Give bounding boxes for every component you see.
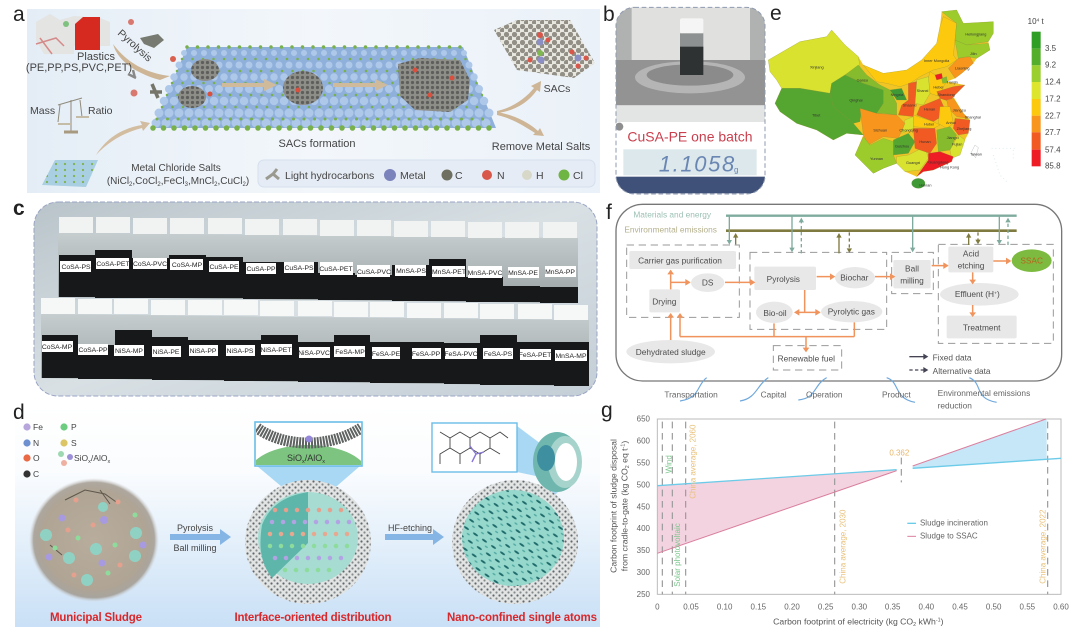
element legend [23, 422, 110, 479]
y tick labels: 350 [637, 546, 651, 555]
node labels: Dehydrated sludge [636, 347, 706, 357]
emissions label: Environmental emissions [624, 224, 717, 234]
color scale: 3.5 [1045, 44, 1057, 53]
bottom vial row: NiSA-MP [115, 348, 143, 355]
map provinces: Yunnan [870, 157, 883, 161]
arrow: salts to lattice [96, 121, 150, 155]
map provinces: Xinjiang [810, 66, 824, 70]
dashed system boundaries [627, 244, 1053, 370]
map provinces: Guizhou [895, 144, 909, 148]
inset: interface: x [302, 459, 305, 465]
x tick labels: 0.05 [683, 602, 699, 611]
scenario labels: Wind [665, 455, 674, 473]
icon: plastics [36, 14, 110, 54]
mass label: Mass [30, 105, 55, 117]
axis titles: 2 [913, 622, 916, 628]
top vial row: CuSA-PVC [357, 269, 391, 276]
node labels [636, 248, 1043, 363]
map provinces: Taiwan [970, 153, 982, 157]
axis titles: Carbon footprint of electricity (kg CO [773, 616, 913, 626]
bottom vial row: FeSA-PET [519, 352, 551, 359]
boundary labels [664, 388, 1030, 410]
y tick labels: 400 [637, 524, 651, 533]
panel c: vial photo [13, 197, 597, 396]
x tick labels [655, 602, 1069, 611]
zoom beam to sphere [528, 480, 570, 505]
axis titles: from cradle-to-gate (kg CO [619, 468, 629, 571]
label f: f [606, 201, 612, 224]
x tick labels: 0.60 [1053, 602, 1069, 611]
top vial row: MnSA-PP [545, 269, 575, 276]
ratio label: Ratio [88, 105, 113, 117]
boundary labels: Capital [761, 390, 787, 400]
bottom vial row: NiSA-PET [261, 347, 291, 354]
color scale: 27.7 [1045, 128, 1061, 137]
element legend: N [33, 438, 39, 448]
legend [258, 160, 595, 187]
data legend [909, 353, 991, 376]
balance reading: 1.1058 [659, 152, 736, 177]
sphere: interface-oriented [245, 480, 371, 604]
legend: H [536, 170, 544, 182]
chart legend [907, 519, 988, 541]
map provinces: Hainan [919, 184, 931, 188]
x tick labels: 0.20 [784, 602, 800, 611]
legend: N [497, 170, 505, 182]
top vial row: CuSA-PP [246, 266, 276, 273]
scenario labels [665, 424, 1047, 587]
batch caption: CuSA-PE one batch [627, 128, 753, 144]
HF etching label: HF-etching [388, 523, 432, 533]
inset: interface: /AlO [305, 453, 322, 463]
node labels: Effluent (H [955, 289, 994, 299]
map provinces: Gansu [857, 78, 868, 82]
label d: d [13, 401, 25, 424]
y tick labels: 550 [637, 458, 651, 467]
data lines [657, 419, 1061, 553]
top vial row: MnSA-PE [508, 270, 538, 277]
map provinces: Hebei [933, 86, 943, 90]
bottom vial row: MnSA-MP [556, 353, 587, 360]
label g: g [601, 399, 613, 422]
color scale: 57.4 [1045, 145, 1061, 154]
top vial row: CuSA-PET [319, 266, 353, 273]
data legend: Fixed data [933, 353, 972, 363]
remove salts label: Remove Metal Salts [492, 141, 591, 153]
bottom vial row: FeSA-PS [484, 351, 513, 358]
map provinces: Guangxi [906, 161, 920, 165]
plot frame [657, 419, 1061, 594]
node labels: Renewable fuel [778, 353, 835, 363]
x tick labels: 0.40 [919, 602, 935, 611]
bottom vial row: CoSA-PP [78, 347, 108, 354]
inset: interface: SiO [287, 453, 302, 463]
carbon clusters [178, 58, 470, 112]
bottom vial row [41, 298, 589, 386]
color scale: 85.8 [1045, 162, 1061, 171]
map provinces: Fujian [952, 142, 962, 146]
element legend: x [107, 459, 110, 465]
axis titles: kWh [916, 616, 936, 626]
axis titles: -1 [936, 618, 941, 624]
label c: c [13, 197, 25, 220]
legend: Metal [400, 170, 426, 182]
bottom vial row: NiSA-PP [190, 348, 217, 355]
y tick labels [637, 415, 651, 599]
map provinces: Zhejiang [957, 127, 971, 131]
map provinces: Jilin [970, 52, 977, 56]
top vial row [58, 217, 578, 303]
salts formula: ,CoCl [132, 176, 157, 187]
node labels: Drying [652, 296, 677, 306]
element legend: O [33, 453, 40, 463]
node labels: Carrier gas purification [638, 256, 722, 266]
pyrolysis label: Pyrolysis [115, 27, 154, 64]
node labels: milling [900, 275, 924, 285]
top vial row: CoSA-PS [61, 264, 91, 271]
boundary labels: Operation [806, 390, 843, 400]
x tick labels: 0.45 [952, 602, 968, 611]
axis titles: Carbon footprint of sludge disposal [609, 439, 619, 573]
bottom vial row: NiSA-PS [227, 348, 254, 355]
map provinces: Henan [924, 107, 935, 111]
bus labels: Materials and energy [633, 210, 712, 220]
boundary labels: Transportation [664, 390, 718, 400]
color scale: 12.4 [1045, 77, 1061, 86]
panel e: China map [768, 2, 1061, 188]
plastics list: (PE,PP,PS,PVC,PET) [26, 62, 132, 74]
chart legend: Sludge to SSAC [920, 532, 978, 541]
map provinces: Anhui [946, 121, 956, 125]
color scale: t [1039, 17, 1045, 26]
element legend: /AlO [91, 453, 108, 463]
map provinces: Hunan [919, 140, 931, 144]
node labels: DS [702, 278, 714, 288]
salts formula: 2 [242, 182, 246, 188]
scenario labels: 0.362 [889, 449, 910, 458]
scenario labels: China average, 2022 [1038, 509, 1047, 584]
salts formula: 2 [129, 182, 133, 188]
panel b: photo of weighed batch [615, 7, 765, 194]
scenario labels: China average, 2030 [839, 509, 848, 584]
map provinces: Shaanxi [903, 103, 917, 107]
y tick labels: 250 [637, 590, 651, 599]
zoom beam [257, 466, 360, 492]
map provinces: Sichuan [873, 128, 887, 132]
zoom beam to tube [517, 426, 545, 478]
map provinces: Tibet [812, 114, 821, 118]
scenario labels: China average, 2060 [688, 424, 697, 499]
node labels: Pyrolytic gas [828, 307, 875, 317]
axis titles: -1 [621, 444, 627, 448]
salts formula: 3 [185, 182, 189, 188]
bottom vial row: CoSA-MP [42, 344, 73, 351]
panel d: sludge to single atoms [13, 401, 600, 627]
inset: carbon lattice [432, 423, 517, 472]
y tick labels: 300 [637, 568, 651, 577]
formation label: SACs formation [278, 138, 356, 150]
top vial row: CoSA-PVC [133, 261, 167, 268]
legend: Cl [573, 170, 583, 182]
y tick labels: 650 [637, 415, 651, 424]
boundary labels: Product [882, 390, 911, 400]
salts label: Metal Chloride Salts [131, 163, 221, 174]
inset: interface [254, 421, 363, 467]
node labels: Pyrolysis [767, 274, 800, 284]
inputs and emissions bus [726, 216, 1017, 253]
element legend: P [71, 422, 77, 432]
axis titles: 2 [625, 465, 631, 468]
map provinces: Tianjin [947, 80, 958, 84]
axis titles [609, 439, 944, 628]
top vial row: CuSA-PS [284, 265, 314, 272]
boundary flow arrows [680, 378, 997, 402]
orange flows [671, 261, 1007, 348]
y tick labels: 500 [637, 480, 651, 489]
node labels: Treatment [963, 322, 1001, 332]
bottom vial row: FeSA-PE [372, 351, 401, 358]
plastics label: Plastics [77, 51, 115, 63]
bottom vial row: FeSA-PP [412, 351, 441, 358]
metal chloride tile [42, 160, 98, 187]
light hydrocarbon molecules [128, 19, 176, 98]
legend: Light hydrocarbons [285, 170, 374, 182]
y tick labels: 600 [637, 436, 651, 445]
map provinces: Heilongjiang [965, 32, 986, 36]
salts formula: ,MnCl [188, 176, 214, 187]
sphere: nano-confined [452, 480, 578, 604]
label e: e [770, 2, 782, 25]
color scale [1028, 17, 1061, 171]
node labels: Biochar [840, 273, 869, 283]
icon: balance [58, 98, 89, 132]
map provinces: Liaoning [955, 66, 969, 70]
chart legend: Sludge incineration [920, 519, 988, 528]
axis titles: eq t [619, 448, 629, 465]
arrow: HF etching [385, 529, 444, 545]
element legend: C [33, 469, 39, 479]
salts formula: ,FeCl [161, 176, 185, 187]
map provinces: Shandong [937, 93, 955, 97]
map provinces: Hubei [924, 122, 934, 126]
arrows along formation [222, 79, 388, 91]
scenario labels: Solar photovoltaic [673, 523, 682, 587]
element legend: x [88, 459, 91, 465]
x tick labels: 0.35 [885, 602, 901, 611]
shaded areas [657, 470, 897, 553]
axis titles: ) [619, 441, 629, 444]
node labels: SSAC [1020, 256, 1043, 266]
salts formula: ,CuCl [217, 176, 242, 187]
color scale: 17.2 [1045, 95, 1061, 104]
bottom vial row: FeSA-PVC [444, 351, 478, 358]
x tick labels: 0 [655, 602, 660, 611]
map provinces: Guangdong [928, 160, 948, 164]
vial [680, 18, 703, 75]
legend: C [455, 170, 463, 182]
element legend: SiO [74, 453, 88, 463]
x tick labels: 0.55 [1020, 602, 1036, 611]
top vial row: MnSA-PET [432, 269, 466, 276]
arrow: pyrolysis [113, 44, 170, 80]
map provinces: Shanghai [965, 115, 981, 119]
municipal sludge image [29, 478, 159, 602]
color scale: 10 [1028, 17, 1037, 26]
boundary labels: reduction [938, 400, 972, 410]
node labels: Acid [963, 248, 979, 258]
salts formula: 2 [214, 182, 218, 188]
panel f: life-cycle flow diagram [616, 204, 1062, 410]
salts formula: 2 [157, 182, 161, 188]
arrow: pyrolysis ball milling [170, 529, 231, 545]
SACs label: SACs [544, 83, 570, 95]
x tick labels: 0.25 [818, 602, 834, 611]
top vial row: MnSA-PS [396, 268, 426, 275]
panel a: SACs synthesis schematic [13, 3, 600, 193]
x tick labels: 0.30 [852, 602, 868, 611]
ball milling label: Ball milling [173, 543, 217, 553]
label a: a [13, 3, 25, 26]
caption: sludge: Municipal Sludge [50, 612, 142, 624]
bottom vial row: NiSA-PVC [298, 350, 330, 357]
node labels: etching [958, 260, 985, 270]
map provinces: Qinghai [849, 98, 863, 102]
bottom vial row: FeSA-MP [335, 349, 365, 356]
top vial row: MnSA-PVC [468, 270, 502, 277]
caption: atoms: Nano-confined single atoms [447, 612, 597, 624]
map provinces [768, 10, 1015, 188]
color scale: 9.2 [1045, 61, 1057, 70]
color scale: 22.7 [1045, 111, 1061, 120]
map provinces: Jiangsu [953, 108, 966, 112]
bottom vial row: NiSA-PE [153, 349, 180, 356]
node labels: ) [997, 289, 1000, 299]
axis titles: ) [941, 616, 944, 626]
data legend: Alternative data [933, 366, 991, 376]
top vial row: CuSA-PE [209, 264, 239, 271]
nanotube [533, 432, 582, 492]
node labels: Ball [905, 263, 919, 273]
top vial row: CoSA-MP [172, 262, 203, 269]
element legend: S [71, 438, 77, 448]
map provinces: Jiangxi [947, 136, 959, 140]
SACs sheet [494, 20, 595, 78]
x tick labels: 0.15 [751, 602, 767, 611]
unit: g [734, 166, 738, 175]
reference lines [662, 422, 1048, 594]
map provinces: Ningxia [891, 93, 904, 97]
map provinces: Inner Mongolia [924, 59, 950, 63]
map provinces: Shanxi [917, 89, 929, 93]
x tick labels: 0.10 [717, 602, 733, 611]
color scale: 4 [1037, 17, 1040, 23]
caption: interface: Interface-oriented distribution [234, 612, 392, 624]
boundary labels: Environmental emissions [938, 388, 1030, 398]
element legend: Fe [33, 422, 43, 432]
panel g: carbon footprint chart [609, 415, 1069, 628]
top vial row: CoSA-PET [96, 261, 130, 268]
salts formula: (NiCl [107, 176, 129, 187]
process labels: Pyrolysis [177, 523, 213, 533]
label b: b [603, 3, 615, 26]
process boxes [626, 247, 1019, 363]
node labels: Bio-oil [763, 308, 787, 318]
lattice sheet [153, 47, 496, 128]
x tick labels: 0.50 [986, 602, 1002, 611]
inset: interface: x [322, 459, 325, 465]
salts formula: ) [246, 176, 249, 187]
node labels: + [994, 290, 997, 296]
arrows to products [497, 81, 544, 136]
map provinces: Hong Kong [940, 166, 959, 170]
map provinces: Chongqing [899, 128, 918, 132]
y tick labels: 450 [637, 502, 651, 511]
